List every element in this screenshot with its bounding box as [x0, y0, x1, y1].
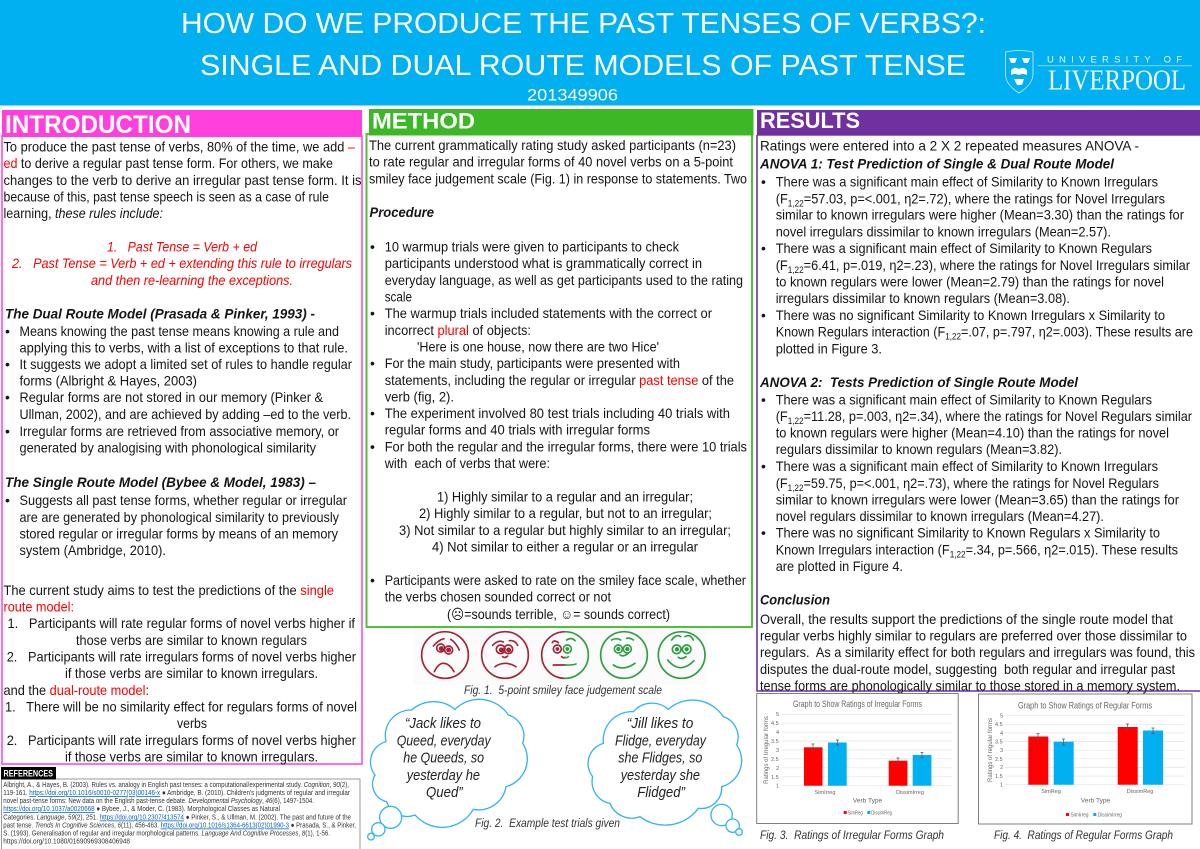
text block: procedure bullets: everyday language, as well as get participants used to the rating [385, 272, 743, 288]
text block: ANOVA 2: (F [776, 408, 789, 424]
y axis labels: 4 [1000, 731, 1003, 737]
y axis labels: 3 [776, 748, 779, 754]
text block: single route model [5, 474, 347, 558]
text block: ANOVA 2: • [761, 458, 766, 474]
heading: references: REFERENCES [4, 768, 53, 778]
text block: verb conditions: 4) Not similar to either a regular or an irregular [432, 538, 698, 554]
logo: University of Liverpool: UNIVERSITY OF [1047, 54, 1182, 66]
text block: rules: 2. Past Tense = Verb + ed + extending this rule to irregulars [11, 255, 352, 271]
text block: reference list [3, 780, 356, 846]
thought bubble: Jack: Qued” [426, 784, 464, 801]
text block: method intro: to rate regular and irregular forms of 40 novel verbs on a 5-point [369, 154, 733, 170]
bars: dissimilar to known irregulars [889, 752, 931, 786]
legend: SimIrreg [1070, 812, 1088, 818]
text block: procedure bullets: • [370, 355, 375, 371]
text block: dual route model: Irregular forms are retrieved from associative memory, or [20, 423, 339, 439]
logo: University of Liverpool [1006, 50, 1192, 96]
heading: results: RESULTS [760, 108, 860, 133]
heading: method: METHOD [372, 108, 475, 134]
text block: predictions: those verbs are similar to known regulars [76, 632, 307, 648]
text block: ANOVA 1: =57.03, p=<.001, η2=.72), where the ratings for Novel Irregulars [804, 190, 1165, 206]
text block: ANOVA 1: (F [776, 190, 789, 206]
text block: ANOVA 1: 1,22 [788, 265, 804, 275]
text block: ANOVA 2: =59.75, p=<.001, η2=.73), where the ratings for Novel Regulars [804, 475, 1159, 491]
text block: dual route model: generated by analogising with phonological similarity [20, 440, 316, 456]
text block: procedure bullets: with each of verbs that were: [384, 455, 550, 471]
y axis labels: 4 [776, 730, 779, 736]
text block: ANOVA 2: Known Irregulars interaction (F [776, 542, 967, 558]
text block: reference list: https://doi.org/10.1080/01690969308406948 [3, 836, 130, 846]
logo: University of Liverpool: LIVERPOOL [1048, 66, 1186, 96]
text block: procedure bullets: • [370, 305, 375, 321]
text block: ANOVA 1: • [761, 174, 766, 190]
text block: conclusion: Overall, the results support the predictions of the single route model that [760, 611, 1173, 627]
panel: results [757, 108, 1200, 694]
text block: ANOVA 2: • [761, 525, 766, 541]
text block: single route model: • [5, 492, 10, 508]
text block: procedure bullets: For both the regular and the irregular forms, there were 10 trials [385, 438, 747, 454]
text block: ANOVA 1: novel irregulars dissimilar to known irregulars (Mean=2.57). [776, 224, 1111, 240]
text block: dual route model: Ullman, 2002), and are achieved by adding –ed to the verb. [20, 406, 351, 422]
panel: method [366, 108, 754, 627]
text block: ANOVA 2: 1,22 [950, 550, 966, 560]
text block: dual route model: Regular forms are not stored in our memory (Pinker & [20, 389, 324, 405]
text block: procedure bullets [370, 238, 747, 471]
bar chart: irregular forms [757, 694, 958, 824]
text block: ANOVA 1: There was a significant main effect of Similarity to Known Regulars [776, 240, 1152, 256]
text block: procedure bullets: The experiment involved 80 test trials including 40 trials with [385, 405, 730, 421]
text block: single route model: are are generated by phonological similarity to previously [20, 509, 339, 525]
icon: very sad face [422, 632, 468, 678]
text block: reference list: past tense. Trends In Cognitive Sciences, 6(11), 456-463. https://doi.org/10.1016/s1364-6613(02)01990-3 ● Prasada, S., & Pinker, [3, 820, 356, 830]
y axis labels: 5 [1000, 714, 1003, 720]
text block: procedure bullets: The warmup trials included statements with the correct or [385, 305, 712, 321]
category and axis labels: DissimReg [1127, 789, 1153, 795]
text block: procedure bullets: 'Here is one house, now there are two Hice' [417, 338, 659, 354]
chart title: Graph to Show Ratings of Regular Forms [1018, 700, 1152, 712]
category and axis labels: Verb Type [853, 798, 882, 804]
y axis labels: 2.5 [771, 757, 779, 763]
y axis labels: 3.5 [771, 739, 779, 745]
caption: figure 1: Fig. 1. 5-point smiley face judgement scale [464, 685, 662, 697]
text block: ANOVA 2: There was no significant Similarity to Known Regulars x Similarity to [776, 525, 1160, 541]
legend: DissimReg [871, 810, 892, 816]
bar chart: regular forms [978, 694, 1192, 824]
y axis labels: 2 [1000, 765, 1003, 771]
thought bubble: Jill: Flidge, everyday [615, 732, 707, 750]
icon: neutral face [542, 632, 588, 678]
chart title: Graph to Show Ratings of Irregular Forms [793, 699, 922, 710]
text block: ANOVA 1: to known regulars were lower (Mean=2.79) than the ratings for novel [776, 274, 1164, 290]
category and axis labels [815, 790, 924, 804]
icon: very happy face [658, 632, 705, 678]
bars: similar to known regulars [1028, 734, 1074, 785]
text block: conclusion [760, 592, 1195, 694]
thought bubble: Jack: Queed, everyday [397, 732, 492, 750]
text block: intro paragraph [4, 138, 362, 221]
text block: ANOVA 1: 1,22 [788, 198, 804, 208]
y axis labels: 1.5 [995, 774, 1003, 780]
text block: dual route model [5, 306, 352, 456]
text block: rules: and then re-learning the exceptions. [91, 272, 293, 288]
text block: ANOVA 2: ANOVA 2: Tests Prediction of Single Route Model [759, 374, 1079, 390]
figure 1: smiley face scale [413, 628, 707, 697]
text block: intro paragraph: learning, these rules include: [4, 205, 163, 221]
text block: procedure bullets: incorrect plural of objects: [385, 322, 531, 338]
text block: rules: 1. Past Tense = Verb + ed [107, 238, 258, 254]
text block: ANOVA 2: to known regulars were higher (Mean=4.10) than the ratings for novel [776, 425, 1169, 441]
y axis labels [764, 712, 779, 790]
icon: happy face [601, 632, 647, 678]
thought bubble: Jill: Flidged” [637, 784, 686, 801]
text block: predictions: and the dual-route model: [4, 682, 149, 698]
text block: ANOVA 1: irregulars dissimilar to known regulars (Mean=3.08). [776, 290, 1070, 306]
text block: reference list: 119-161. https://doi.org/10.1016/s0010-0277(03)00146-x ● Ambridge, B. (2010). Children's judgments of regular and irregular [3, 788, 350, 797]
y axis labels: 3 [1000, 748, 1003, 754]
text block: rating instructions: • [370, 572, 375, 588]
text block: procedure bullets: regular forms and 40 trials with irregular forms [385, 422, 650, 438]
text block: procedure bullets: 10 warmup trials were given to participants to check [385, 238, 680, 254]
text block: ANOVA 2: =.34, p=.566, η2=.015). These results [966, 542, 1178, 558]
text block: single route model: Suggests all past tense forms, whether regular or irregular [20, 492, 347, 508]
text block: reference list: https://doi.org/10.1037/a0020668 ● Bybee, J., & Moder, C. (1983). Morphological Classes as Natural [3, 804, 280, 813]
y axis labels: 2.5 [995, 757, 1003, 763]
y axis labels: 4.5 [771, 721, 779, 727]
text block: dual route model: • [5, 323, 10, 339]
legend [844, 810, 892, 816]
text block: dual route model: applying this to verbs, with a list of exceptions to that rule. [20, 340, 348, 356]
text block: verb conditions [399, 488, 731, 554]
text block: single route model: system (Ambridge, 2010). [20, 542, 166, 558]
text block: rating instructions [370, 572, 746, 622]
text block: predictions: The current study aims to test the predictions of the single [4, 582, 334, 598]
text block: predictions: if those verbs are similar to known irregulars. [65, 748, 318, 764]
text block: reference list: Albright, A., & Hayes, B. (2003). Rules vs. analogy in English past tenses: a computational/experimental study. Cognition, 90(2), [3, 780, 349, 789]
text block: method intro: The current grammatically rating study asked participants (n=23) [369, 137, 736, 153]
text block: dual route model: It suggests we adopt a limited set of rules to handle regular [20, 356, 352, 372]
y axis labels [988, 714, 1003, 788]
y axis labels: 1 [776, 784, 779, 790]
text block: ANOVA 2: 1,22 [788, 416, 804, 426]
text block: intro paragraph: ed to derive a regular past tense form. For others, we make [4, 155, 333, 171]
legend: DissimIrreg [1098, 812, 1122, 818]
text block: procedure bullets: For the main study, participants were presented with [385, 355, 680, 371]
text block: predictions: route model: [4, 598, 74, 614]
text block: predictions: 2. Participants will rate irregulars forms of novel verbs higher [7, 732, 356, 748]
text block: predictions: if those verbs are similar to known irregulars. [65, 665, 318, 681]
text block: ANOVA 2: regulars dissimilar to known regulars (Mean=3.82). [776, 441, 1062, 457]
text block: ANOVA 1: 1,22 [945, 332, 961, 342]
header banner [0, 0, 1200, 106]
thought bubble: Jack: yesterday he [406, 767, 480, 784]
heading: introduction: INTRODUCTION [5, 111, 191, 139]
text block: reference list: Categories. Language, 59(2), 251. https://doi.org/10.2307/413574 ● Pinker, S., & Ullman, M. (2002). The past and future of the [3, 812, 351, 822]
text block: reference list: S. (1993). Generalisation of regular and irregular morphological patterns. Language And Cognitive Processes, 8(1), 1-56. [3, 828, 330, 838]
panel: introduction [2, 110, 362, 764]
y axis labels: 3.5 [995, 740, 1003, 746]
thought bubble: Jack: he Queeds, so [403, 750, 484, 766]
category and axis labels [1041, 789, 1153, 804]
panel: references [1, 767, 360, 849]
title: HOW DO WE PRODUCE THE PAST TENSES OF VERBS?: [181, 8, 986, 40]
thought bubble: Jack: “Jack likes to [405, 715, 481, 732]
text block: ANOVA 2: (F [776, 475, 789, 491]
bars: dissimilar to known regulars [1118, 724, 1163, 785]
legend: SimReg [848, 810, 863, 816]
category and axis labels: Verb Type [1081, 798, 1110, 804]
text block: procedure bullets: statements, including the regular or irregular past tense of the [385, 372, 734, 388]
text block: method intro [369, 137, 747, 186]
text block: predictions: 2. Participants will rate irregulars forms of novel verbs higher [7, 648, 356, 664]
text block: intro paragraph: changes to the verb to derive an irregular past tense form. It is [4, 172, 362, 188]
figure 2: example test trials [368, 699, 742, 840]
text block: ANOVA 2: 1,22 [788, 483, 804, 493]
text block: ANOVA 1: Ratings were entered into a 2 X 2 repeated measures ANOVA - [760, 138, 1139, 154]
text block: ANOVA 1: ANOVA 1: Test Prediction of Single & Dual Route Model [759, 156, 1115, 172]
caption: figure 2: Fig. 2. Example test trials given [475, 818, 620, 830]
title [181, 8, 986, 82]
legend [1066, 812, 1122, 818]
heading: procedure: Procedure [370, 204, 434, 220]
student id: 201349906 [527, 86, 618, 104]
text block: rating instructions: Participants were asked to rate on the smiley face scale, whether [385, 572, 746, 588]
text block: ANOVA 1 [759, 138, 1193, 356]
text block: ANOVA 1: • [761, 307, 766, 323]
text block: ANOVA 2: There was a significant main effect of Similarity to Known Regulars [776, 392, 1152, 408]
text block: dual route model: forms (Albright & Hayes, 2003) [20, 372, 197, 388]
y axis labels: 1.5 [771, 775, 779, 781]
text block: rating instructions: the verbs chosen sounded correct or not [385, 588, 611, 604]
text block: procedure bullets: • [370, 405, 375, 421]
y axis labels: 5 [776, 712, 779, 718]
text block: predictions: 1. Participants will rate regular forms of novel verbs higher if [8, 615, 355, 631]
thought bubble: Jill: yesterday she [620, 767, 700, 784]
text block: ANOVA 2: There was a significant main effect of Similarity to Known Irregulars [776, 458, 1158, 474]
text block: dual route model: Means knowing the past tense means knowing a rule and [20, 323, 339, 339]
text block: dual route model: The Dual Route Model (Prasada & Pinker, 1993) - [5, 306, 315, 322]
text block: dual route model: • [5, 356, 10, 372]
text block: single route model: stored regular or irregular forms by means of an memory [20, 526, 338, 542]
text block: dual route model: • [5, 389, 10, 405]
thought bubble: Jill [588, 700, 742, 835]
text block: dual route model: • [5, 423, 10, 439]
text block: verb conditions: 3) Not similar to a regular but highly similar to an irregular; [399, 522, 731, 538]
text block: ANOVA 1: There was no significant Similarity to Known Irregulars x Similarity to [776, 307, 1165, 323]
text block: intro paragraph: because of this, past tense speech is seen as a case of rule [4, 188, 329, 204]
text block: verb conditions: 1) Highly similar to a regular and an irregular; [437, 488, 693, 504]
icon: sad face [482, 632, 528, 678]
thought bubble: Jill: “Jill likes to [627, 715, 693, 732]
text block: intro paragraph: To produce the past tense of verbs, 80% of the time, we add – [4, 138, 355, 154]
text block: ANOVA 1: plotted in Figure 3. [776, 340, 882, 356]
text block: procedure bullets: verb (fig, 2). [385, 388, 454, 404]
bars: similar to known irregulars [804, 740, 847, 786]
text block: procedure bullets: • [370, 438, 375, 454]
text block: method intro: smiley face judgement scale (Fig. 1) in response to statements. Two [369, 170, 747, 186]
caption: figure 3: Fig. 3. Ratings of Irregular Forms Graph [760, 830, 944, 842]
text block: procedure bullets: participants understood what is grammatically correct in [385, 255, 702, 271]
text block: ANOVA 2: are plotted in Figure 4. [776, 558, 903, 574]
thought bubble: Jill: she Flidges, so [618, 750, 702, 766]
text block: procedure bullets: • [370, 238, 375, 254]
text block: ANOVA 1: • [761, 240, 766, 256]
text block: reference list: novel past-tense forms: New data on the English past-tense debate. Developmental Psychology, 46(6), 1497-1504. [3, 796, 314, 805]
text block: rules [11, 238, 352, 288]
text block: verb conditions: 2) Highly similar to a regular, but not to an irregular; [419, 505, 712, 521]
caption: figure 4: Fig. 4. Ratings of Regular Forms Graph [994, 830, 1173, 842]
category and axis labels: SimReg [1041, 789, 1061, 795]
text block: predictions: 1. There will be no similarity effect for regulars forms of novel [5, 698, 357, 714]
text block: single route model: The Single Route Model (Bybee & Model, 1983) – [5, 474, 316, 490]
y axis labels: Ratings of Irregular forms [764, 716, 770, 784]
text block: ANOVA 2: novel regulars dissimilar to known irregulars (Mean=4.27). [776, 508, 1104, 524]
text block: predictions: verbs [177, 715, 207, 731]
y axis labels: Ratings of regular forms [988, 718, 994, 782]
text block: ANOVA 1: Known Regulars interaction (F [776, 324, 964, 340]
text block: rating instructions: (☹=sounds terrible, ☺= sounds correct) [447, 606, 670, 622]
thought bubble: Jack [368, 699, 527, 840]
category and axis labels: DissimIrreg [896, 790, 924, 796]
y axis labels: 1 [1000, 782, 1003, 788]
text block: ANOVA 2 [759, 374, 1192, 574]
text block: ANOVA 2: • [761, 392, 766, 408]
text block: procedure bullets: scale [385, 288, 412, 304]
text block: conclusion: Conclusion [760, 592, 830, 608]
text block: predictions [4, 582, 357, 764]
text block: ANOVA 1: (F [776, 257, 789, 273]
title: SINGLE AND DUAL ROUTE MODELS OF PAST TENSE [200, 50, 966, 82]
y axis labels: 4.5 [995, 722, 1003, 728]
y axis labels: 2 [776, 766, 779, 772]
text block: ANOVA 1: There was a significant main effect of Similarity to Known Irregulars [776, 174, 1158, 190]
category and axis labels: SimIrreg [815, 790, 835, 796]
